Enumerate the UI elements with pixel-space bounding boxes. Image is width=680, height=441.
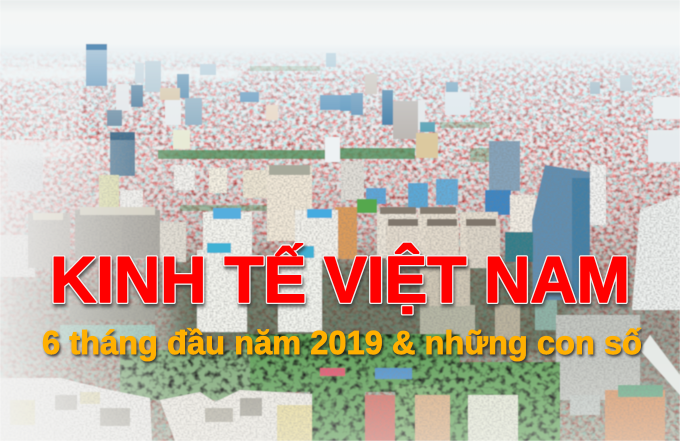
subtitle: 6 tháng đầu năm 2019 & những con số [42, 324, 642, 361]
bottom-left white buildings [0, 378, 312, 441]
distant towers [86, 44, 680, 162]
green tree belts [158, 66, 490, 211]
tree canopy [120, 334, 560, 441]
photo haze overlays [0, 140, 190, 441]
right road [640, 335, 680, 395]
title: KINH TẾ VIỆT NAM [50, 243, 630, 316]
blue glass tower [532, 165, 590, 300]
lower mid blocks [60, 268, 640, 400]
bottom neighbourhood blocks [320, 368, 665, 441]
lawn [357, 199, 377, 213]
river at horizon [0, 68, 240, 80]
dark ground between mid towers [10, 258, 680, 400]
white right towers [505, 195, 680, 330]
mid-rise buildings [0, 132, 606, 277]
rooftops [33, 165, 496, 258]
main cream tower [197, 165, 338, 332]
title: KINH TẾ VIỆT NAM [50, 243, 630, 316]
